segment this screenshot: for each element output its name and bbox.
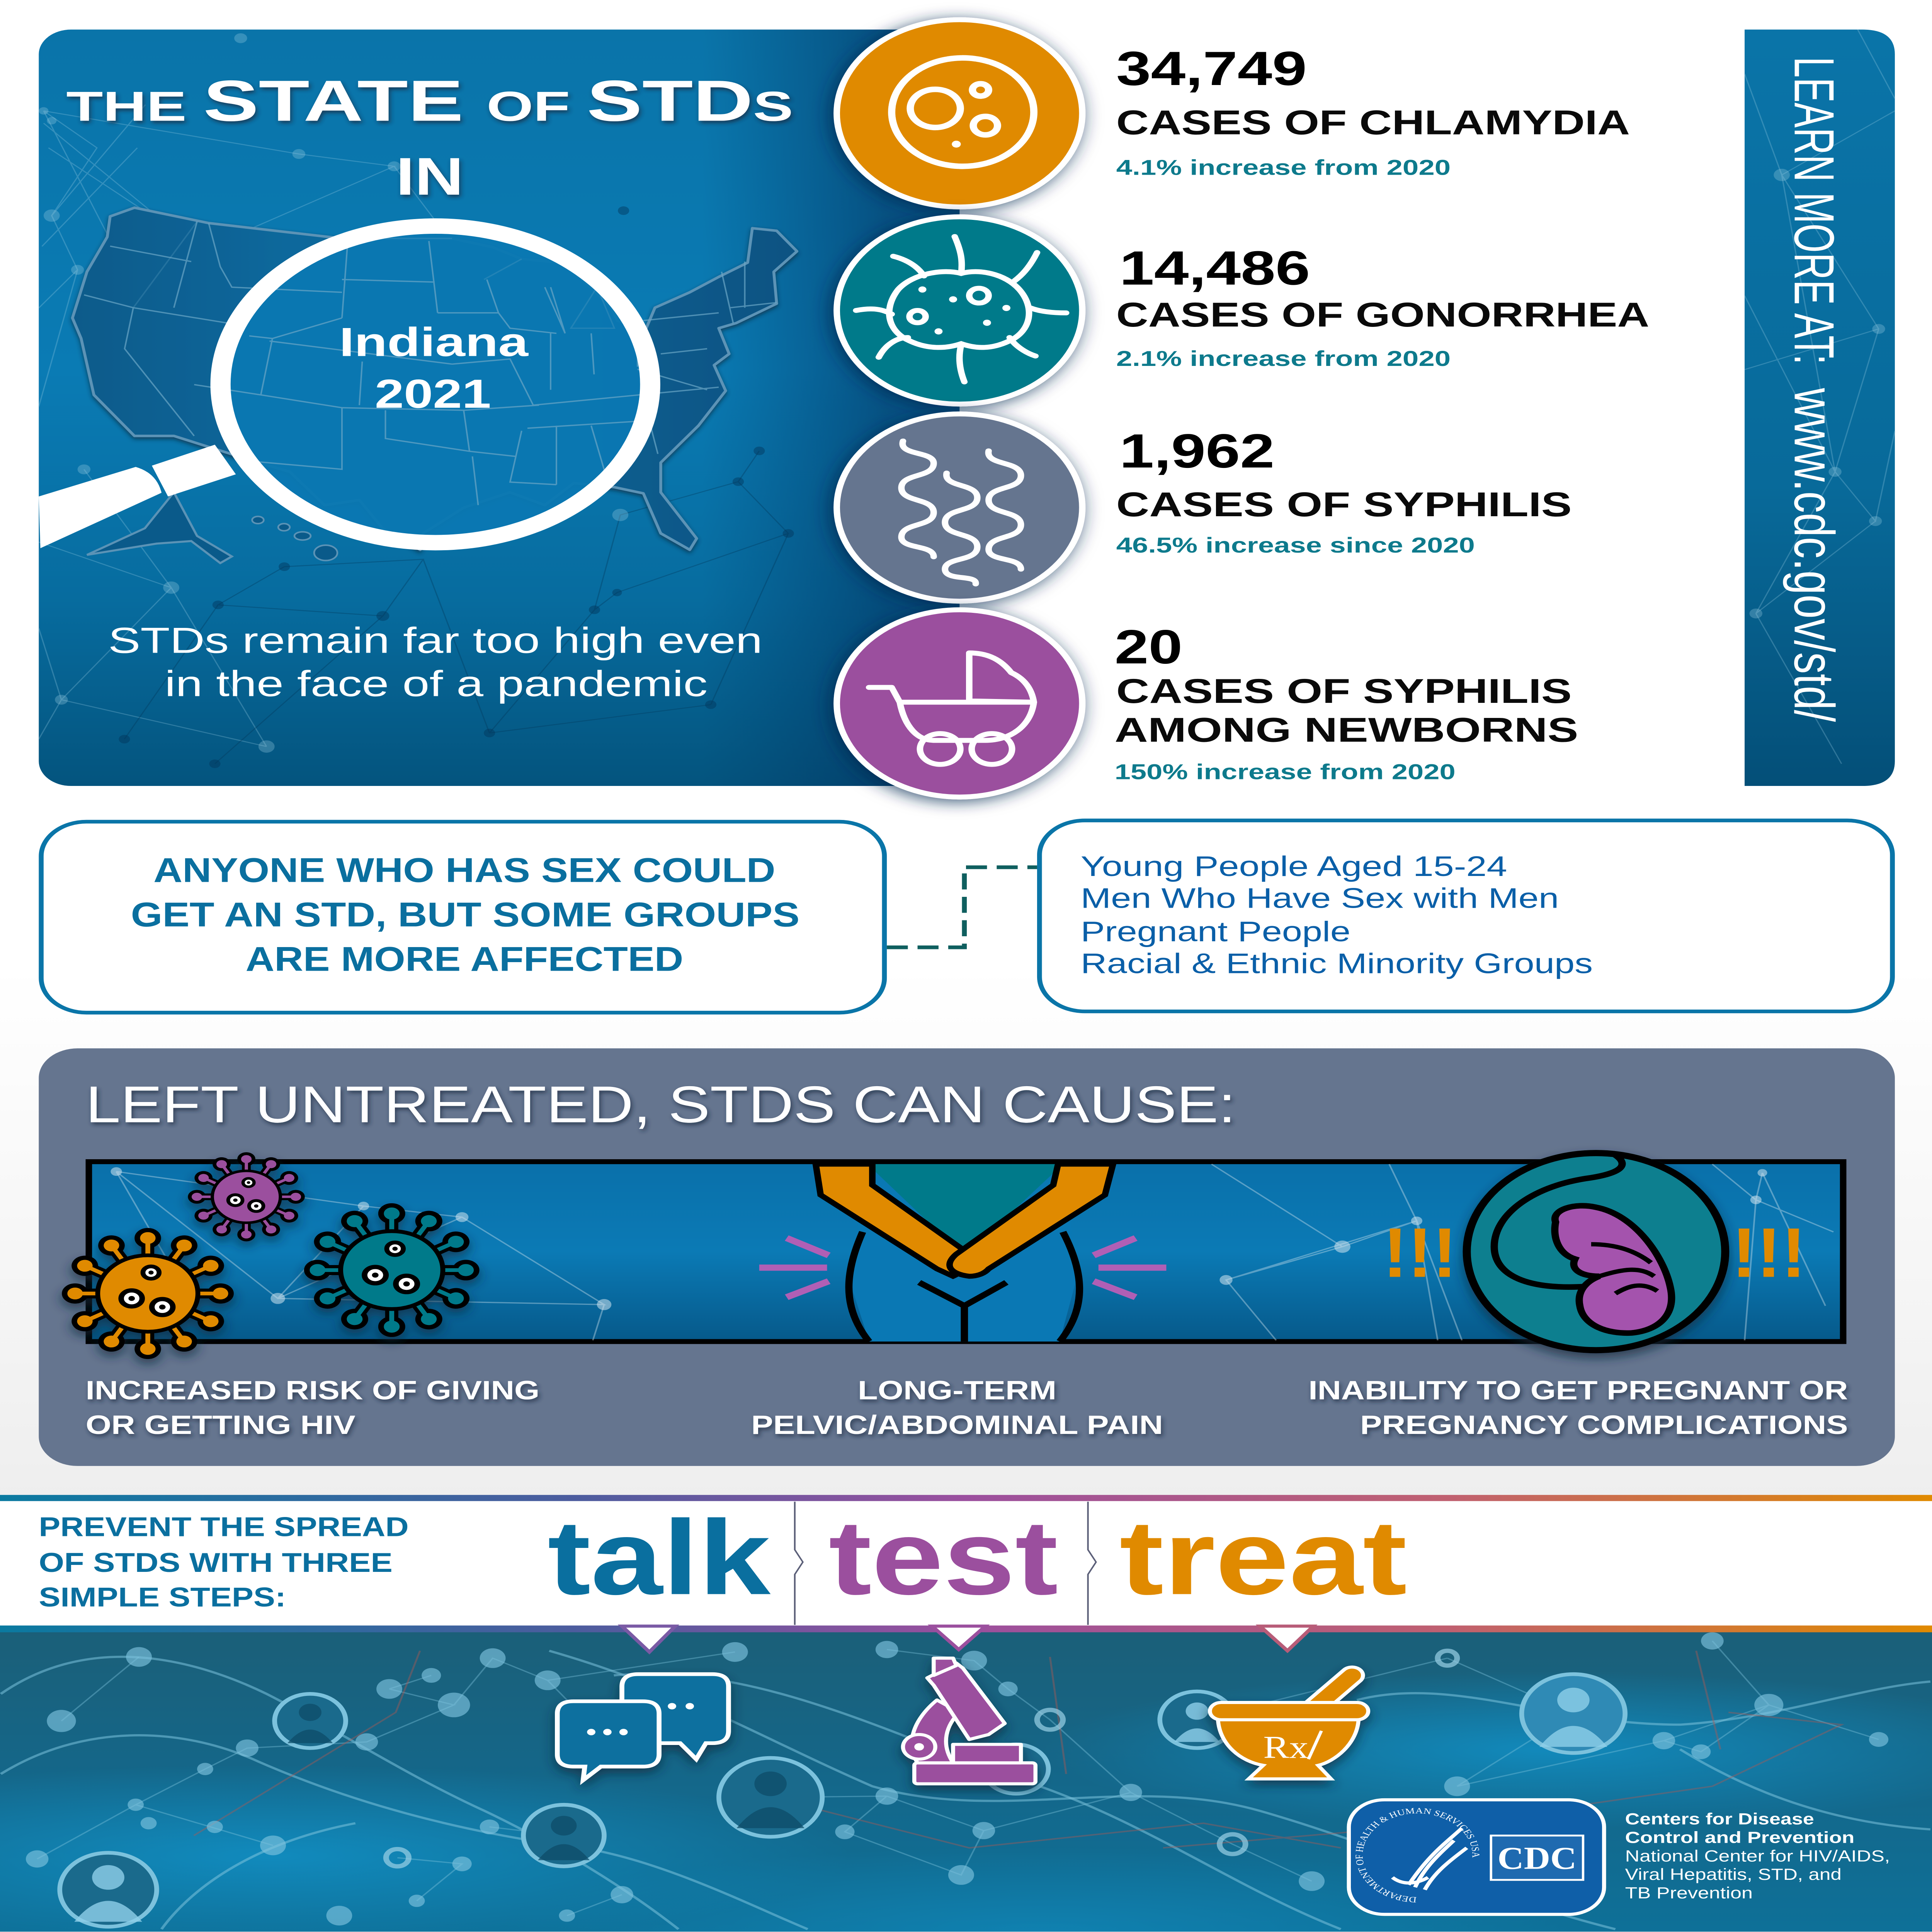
icon: gonorrhea — [837, 217, 1082, 404]
learn more text: LEARN MORE AT: — [1782, 57, 1846, 365]
prevention heading: PREVENT THE SPREAD — [39, 1512, 409, 1542]
handle — [39, 467, 162, 548]
panel: learn more sidebar — [1745, 30, 1895, 786]
illustration band — [89, 1162, 1843, 1342]
stat: syphilis — [837, 414, 1572, 601]
stat: chlamydia: CASES OF CHLAMYDIA — [1116, 104, 1630, 142]
icon: exclamation marks left: !!! — [1383, 1213, 1457, 1292]
number and label: 14,486 — [1119, 241, 1310, 295]
learn more text — [1782, 57, 1846, 722]
agency text: Centers for Disease — [1625, 1810, 1814, 1828]
separators — [795, 1502, 1096, 1625]
location label — [339, 319, 529, 417]
number and label: 20 — [1115, 620, 1182, 673]
agency text: TB Prevention — [1625, 1884, 1753, 1902]
stat: congenital syphilis: 150% increase from 2020 — [1115, 760, 1456, 784]
callout: affected groups — [1039, 820, 1893, 1011]
caption: pelvic pain: LONG-TERM — [858, 1376, 1056, 1405]
title: IN — [396, 146, 464, 206]
stat: congenital syphilis: AMONG NEWBORNS — [1115, 711, 1578, 749]
magnifying glass — [39, 226, 650, 548]
prevention heading: OF STDS WITH THREE — [39, 1548, 393, 1578]
state borders — [84, 221, 777, 505]
lens ring — [221, 226, 650, 543]
callout: affected groups: Young People Aged 15-24 — [1081, 851, 1507, 882]
icon: mortar and pestle: Rx — [1263, 1730, 1308, 1765]
icon: pelvic pain figure — [759, 1164, 1166, 1342]
prevention heading: SIMPLE STEPS: — [39, 1582, 286, 1612]
agency text: Control and Prevention — [1625, 1829, 1854, 1847]
stat: chlamydia — [837, 20, 1630, 207]
agency text — [1625, 1810, 1890, 1902]
agency text: National Center for HIV/AIDS, — [1625, 1847, 1890, 1865]
arrow pointers — [622, 1626, 1313, 1652]
tagline — [108, 621, 762, 704]
caption: pelvic pain: PELVIC/ABDOMINAL PAIN — [751, 1410, 1163, 1440]
location label: Indiana — [339, 319, 529, 365]
logo: HHS and CDC — [1349, 1800, 1604, 1914]
callout: affected groups: Racial & Ethnic Minority Groups — [1081, 948, 1593, 980]
number and label: 1,962 — [1119, 424, 1274, 478]
panel: left untreated — [39, 1048, 1895, 1466]
caption: pregnancy — [1308, 1376, 1848, 1440]
icon: chat bubbles — [557, 1674, 728, 1780]
tagline: STDs remain far too high even — [108, 621, 762, 661]
caption: pregnancy: INABILITY TO GET PREGNANT OR — [1308, 1376, 1848, 1405]
word: talk: talk — [548, 1498, 771, 1617]
callout: affected groups: Pregnant People — [1081, 916, 1350, 947]
icon: syphilis — [837, 414, 1082, 601]
word: test: test — [829, 1498, 1058, 1617]
panel: network background — [0, 1629, 1932, 1932]
stat: syphilis: 46.5% increase since 2020 — [1116, 533, 1475, 557]
icon: chlamydia — [837, 20, 1082, 207]
panel: state of STDs hero — [39, 30, 959, 786]
icon: mortar and pestle — [1210, 1675, 1368, 1779]
magnifying glass lens interior — [220, 225, 650, 543]
agency text: Viral Hepatitis, STD, and — [1625, 1866, 1842, 1884]
icon: exclamation marks right: !!! — [1732, 1213, 1806, 1292]
eagle mark — [1393, 1828, 1467, 1890]
stat: congenital syphilis — [837, 610, 1578, 797]
stat: gonorrhea: CASES OF GONORRHEA — [1116, 296, 1649, 334]
stat: syphilis: CASES OF SYPHILIS — [1116, 485, 1572, 524]
icon: fetus — [1467, 1153, 1725, 1350]
seal lettering: DEPARTMENT OF HEALTH & HUMAN SERVICES USA — [1354, 1806, 1481, 1904]
panel: talk test treat band — [0, 1495, 1932, 1652]
caption: HIV risk — [86, 1376, 539, 1440]
stat: congenital syphilis: CASES OF SYPHILIS — [1116, 672, 1572, 711]
people icons — [60, 1674, 1625, 1927]
heading: LEFT UNTREATED, STDS CAN CAUSE: — [86, 1076, 1236, 1134]
word: treat: treat — [1119, 1498, 1407, 1617]
icon: viruses — [65, 1154, 476, 1357]
callout: anyone who has sex: ANYONE WHO HAS SEX COULD — [153, 851, 776, 889]
stat: chlamydia: 4.1% increase from 2020 — [1116, 155, 1451, 180]
icon: baby stroller — [837, 610, 1082, 797]
number and label: 34,749 — [1116, 42, 1307, 95]
CDC mark: CDC — [1497, 1840, 1577, 1876]
tagline: in the face of a pandemic — [165, 663, 707, 704]
callout: anyone who has sex: ARE MORE AFFECTED — [245, 940, 683, 978]
caption: pelvic pain — [751, 1376, 1163, 1440]
learn more text: www.cdc.gov/std/ — [1782, 388, 1846, 722]
title: THE STATE OF STD S — [66, 69, 793, 133]
callout: anyone who has sex — [41, 822, 884, 1013]
icon: microscope — [903, 1658, 1036, 1784]
caption: pregnancy: PREGNANCY COMPLICATIONS — [1360, 1410, 1848, 1440]
callout: anyone who has sex: GET AN STD, BUT SOME GROUPS — [131, 896, 799, 934]
location label: 2021 — [375, 371, 491, 417]
prevention heading — [39, 1512, 409, 1612]
stat: gonorrhea — [837, 217, 1649, 404]
title — [66, 69, 793, 206]
stat: gonorrhea: 2.1% increase from 2020 — [1116, 346, 1451, 371]
connector dashed line — [887, 867, 1037, 947]
caption: HIV risk: INCREASED RISK OF GIVING — [86, 1376, 539, 1405]
callout: affected groups: Men Who Have Sex with Men — [1081, 883, 1559, 914]
map of the United States — [73, 208, 797, 563]
caption: HIV risk: OR GETTING HIV — [86, 1410, 355, 1440]
